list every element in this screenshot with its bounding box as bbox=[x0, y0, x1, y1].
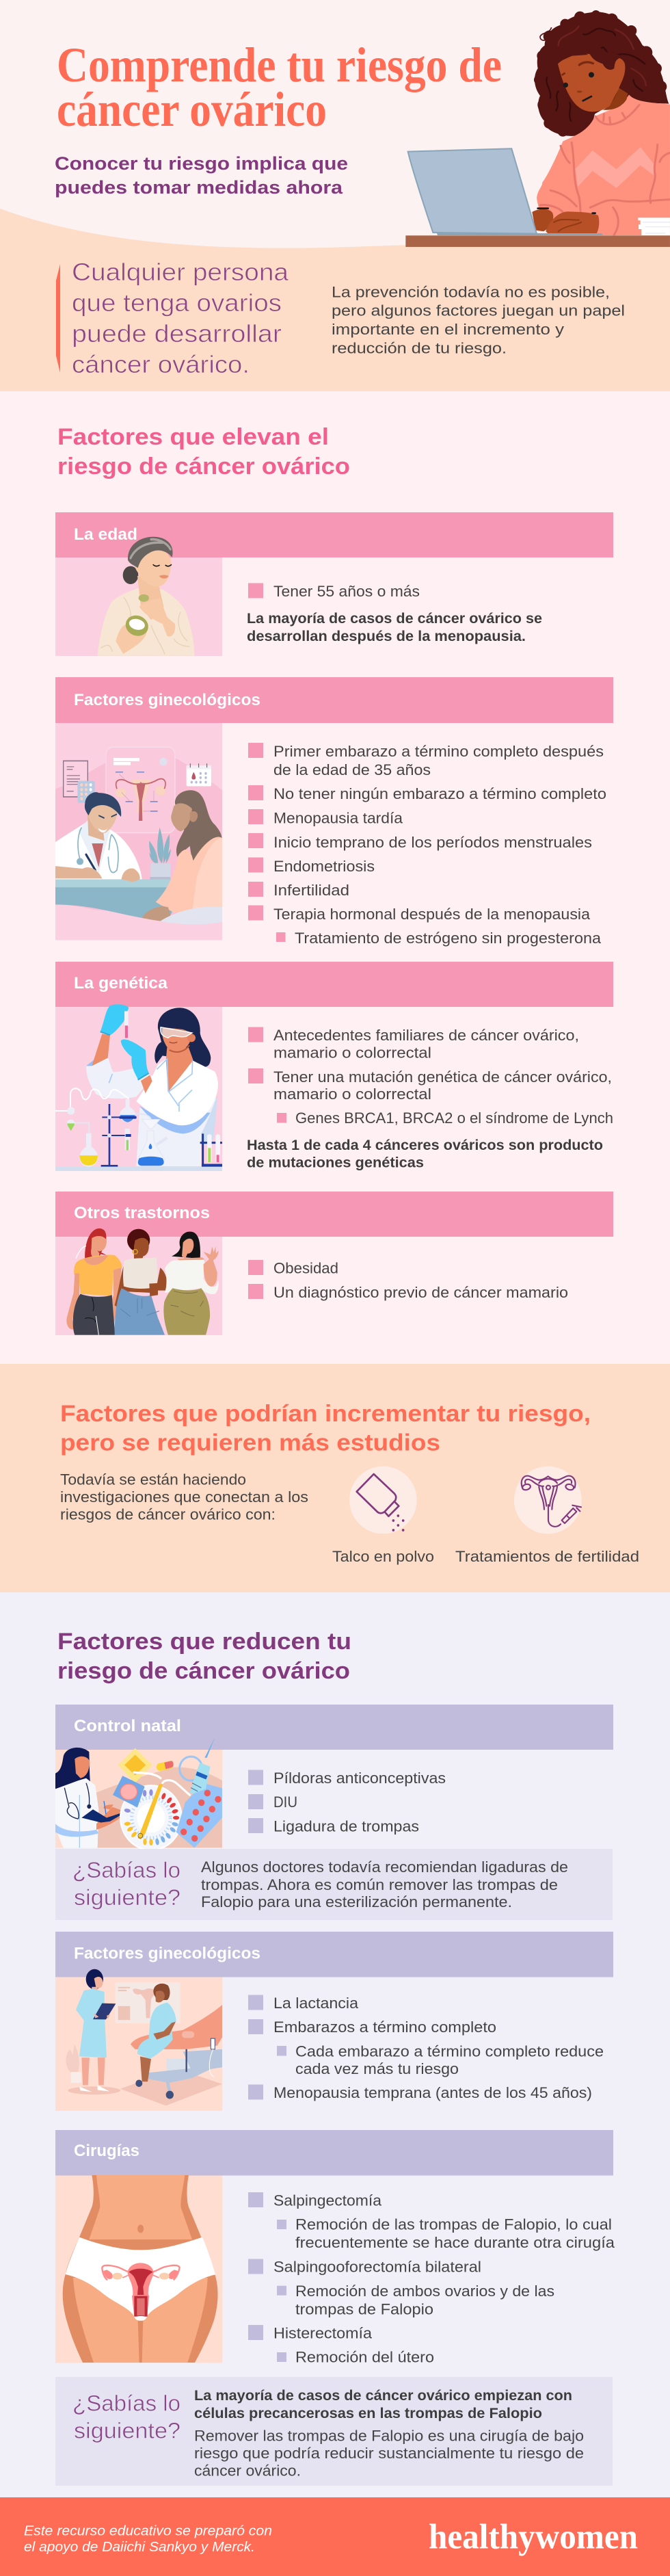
panel: gynecological factors (risk): Tratamiento de estrógeno sin progesterona bbox=[295, 930, 602, 947]
panel: surgeries: ¿Sabías lo bbox=[72, 2391, 180, 2416]
panel: genetics: Antecedentes familiares de cáncer ovárico, bbox=[273, 1027, 579, 1044]
panel: gynecological factors (risk): Menopausia tardía bbox=[273, 810, 403, 826]
panel: other conditions bbox=[55, 999, 613, 1335]
callout bar bbox=[56, 264, 60, 373]
panel: surgeries: Remoción de las trompas de Falopio, lo cual bbox=[295, 2216, 612, 2233]
hands bbox=[532, 209, 553, 231]
labels: Talco en polvo bbox=[332, 1548, 434, 1565]
list bbox=[248, 1770, 263, 1785]
panel: factors needing more study: Tratamientos de fertilidad bbox=[455, 1548, 639, 1565]
callout bbox=[55, 1849, 613, 1920]
plant bbox=[149, 828, 171, 863]
callout statement: cáncer ovárico. bbox=[72, 350, 250, 378]
text: riesgos de cáncer ovárico con: bbox=[60, 1506, 276, 1523]
callout statement: Cualquier persona bbox=[72, 258, 289, 286]
laptop bbox=[437, 233, 603, 235]
illustration: doctor and patient bbox=[55, 747, 222, 939]
flask yellow bbox=[79, 1133, 98, 1167]
plant bbox=[66, 2045, 79, 2072]
intro paragraph: La prevención todavía no es posible, bbox=[332, 283, 610, 300]
sponsor note bbox=[24, 2523, 272, 2555]
sponsor note: Este recurso educativo se preparó con bbox=[24, 2523, 272, 2539]
band bbox=[55, 677, 613, 723]
test tube bbox=[124, 1011, 129, 1038]
IUD bbox=[134, 1772, 190, 1795]
panel: surgeries: siguiente? bbox=[74, 2419, 180, 2443]
band bbox=[55, 1192, 613, 1237]
illustration: older woman with cream bbox=[98, 537, 194, 656]
heading bbox=[60, 1401, 591, 1456]
tubes bbox=[55, 1088, 129, 1111]
panel: birth control: Ligadura de trompas bbox=[273, 1818, 419, 1835]
funnel flask bbox=[135, 1114, 151, 1120]
list bbox=[248, 1995, 263, 2010]
papers bbox=[638, 218, 670, 235]
band bbox=[55, 1932, 613, 1977]
list bbox=[248, 743, 263, 758]
text: investigaciones que conectan a los bbox=[60, 1488, 308, 1506]
subtitle: Conocer tu riesgo implica que bbox=[55, 153, 348, 174]
panel: surgeries: células precancerosas en las trompas de Falopio bbox=[194, 2405, 542, 2421]
panel: gynecological factors (risk): Inicio temprano de los períodos menstruales bbox=[273, 834, 592, 851]
floor shadows bbox=[120, 2068, 222, 2105]
panel: surgeries: Histerectomía bbox=[273, 2325, 373, 2342]
heading: factors that reduce risk bbox=[57, 1629, 351, 1684]
panel: age: Tener 55 años o más bbox=[273, 583, 420, 600]
callout statement: que tenga ovarios bbox=[72, 289, 282, 317]
panel: gynecological factors (protective): Embarazos a término completo bbox=[273, 2019, 496, 2036]
hair bbox=[155, 1008, 211, 1067]
round flask bbox=[120, 1099, 135, 1122]
uterus bbox=[102, 2263, 180, 2319]
table bbox=[55, 880, 174, 888]
face bbox=[603, 88, 628, 110]
panel: genetics bbox=[55, 962, 613, 1171]
heading: pero se requieren más estudios bbox=[60, 1430, 440, 1456]
panel: other conditions: Otros trastornos bbox=[74, 1204, 210, 1222]
panel: gynecological factors (risk) bbox=[55, 677, 613, 947]
band bbox=[55, 512, 613, 557]
panel: other conditions: Obesidad bbox=[273, 1260, 338, 1276]
panel: factors needing more study bbox=[60, 1401, 639, 1565]
callout statement bbox=[72, 258, 289, 378]
panel: surgeries: Salpingectomía bbox=[273, 2192, 382, 2209]
condom blue bbox=[113, 1776, 145, 1807]
panel: surgeries: Cirugías bbox=[74, 2142, 139, 2160]
illustration: three women bbox=[66, 999, 219, 1335]
pill bbox=[156, 1760, 174, 1772]
patient bbox=[175, 790, 222, 886]
panel: gynecological factors (risk): Terapia hormonal después de la menopausia bbox=[273, 906, 591, 923]
panel: surgeries: La mayoría de casos de cáncer ovárico empiezan con bbox=[194, 2387, 572, 2404]
title: Comprende tu riesgo de bbox=[57, 38, 502, 92]
intro paragraph bbox=[332, 283, 625, 357]
panel: gynecological factors (risk): No tener ningún embarazo a término completo bbox=[273, 785, 606, 802]
panel: genetics: Tener una mutación genética de cáncer ovárico, bbox=[273, 1068, 612, 1086]
panel: other conditions: Un diagnóstico previo de cáncer mamario bbox=[273, 1284, 568, 1301]
band bbox=[55, 1705, 613, 1750]
condom yellow bbox=[118, 1748, 152, 1783]
panel: gynecological factors (protective): Factores ginecológicos bbox=[74, 1944, 260, 1962]
intro paragraph: reducción de tu riesgo. bbox=[332, 340, 507, 357]
illustration: torso and uterus bbox=[63, 2175, 218, 2363]
panel: surgeries: Remover las trompas de Falopio es una cirugía de bajo bbox=[194, 2428, 584, 2445]
text bbox=[60, 1471, 308, 1523]
stand bbox=[101, 1104, 118, 1166]
text: Todavía se están haciendo bbox=[60, 1471, 246, 1488]
band bbox=[55, 2130, 613, 2175]
intro paragraph: importante en el incremento y bbox=[332, 321, 564, 338]
logo wordmark: healthywomen bbox=[429, 2518, 638, 2557]
list bbox=[248, 1027, 263, 1042]
panel: surgeries: trompas de Falopio bbox=[295, 2301, 433, 2318]
note: La mayoría de casos de cáncer ovárico se bbox=[247, 610, 542, 627]
list bbox=[248, 583, 263, 598]
wall poster bbox=[116, 1982, 180, 2023]
panel: gynecological factors (risk): Infertilidad bbox=[273, 882, 349, 899]
rack bbox=[200, 1133, 222, 1165]
panel: surgeries: Salpingooforectomía bilateral bbox=[273, 2259, 481, 2275]
doctor bbox=[86, 1969, 103, 1989]
panel: genetics: La genética bbox=[74, 974, 168, 993]
band bbox=[55, 962, 613, 1007]
doctor bbox=[55, 821, 142, 880]
sweater bbox=[537, 94, 670, 235]
panel: gynecological factors (risk): de la edad de 35 años bbox=[273, 761, 431, 778]
note: Hasta 1 de cada 4 cánceres ováricos son producto bbox=[247, 1137, 603, 1153]
illustration: contraceptives bbox=[55, 1737, 222, 1850]
panel: gynecological factors (risk): Factores ginecológicos bbox=[74, 691, 260, 709]
blister pack bbox=[176, 1783, 222, 1848]
panel: genetics: de mutaciones genéticas bbox=[247, 1155, 424, 1171]
panel: surgeries: Remoción del útero bbox=[295, 2349, 434, 2366]
list bbox=[248, 1260, 263, 1275]
heading: factors that raise risk: riesgo de cáncer ovárico bbox=[57, 454, 350, 479]
panel: birth control: Píldoras anticonceptivas bbox=[273, 1770, 446, 1787]
table bbox=[405, 235, 670, 247]
dial pack bbox=[120, 1785, 182, 1850]
panel: gynecological factors (risk): Endometriosis bbox=[273, 858, 375, 875]
panel: birth control: siguiente? bbox=[74, 1885, 180, 1910]
hair bbox=[534, 10, 669, 137]
heading: factors that reduce risk: Factores que reducen tu bbox=[57, 1629, 351, 1655]
panel: birth control: DIU bbox=[273, 1793, 297, 1811]
neck and chest bbox=[166, 1048, 193, 1092]
exam table bbox=[167, 2059, 189, 2071]
panel: gynecological factors (risk): Primer embarazo a término completo después bbox=[273, 743, 604, 760]
panel: birth control: ¿Sabías lo bbox=[72, 1858, 180, 1882]
icon: fertility treatment bbox=[514, 1467, 582, 1534]
panel: birth control: Algunos doctores todavía recomiendan ligaduras de bbox=[201, 1858, 568, 1876]
panel: birth control bbox=[55, 1705, 613, 1920]
syringe bbox=[180, 1757, 202, 1780]
title bbox=[57, 38, 502, 137]
arm and gloves bbox=[141, 1075, 152, 1093]
panel: birth control: Falopio para una esterilización permanente. bbox=[201, 1893, 512, 1910]
panel: gynecological factors (protective): Menopausia temprana (antes de los 45 años) bbox=[273, 2084, 592, 2101]
panel: gynecological factors (protective): Cada embarazo a término completo reduce bbox=[295, 2042, 604, 2060]
panel: age: desarrollan después de la menopausia. bbox=[247, 628, 526, 644]
underwear bbox=[66, 2237, 215, 2321]
panel: gynecological factors (protective): La lactancia bbox=[273, 1995, 359, 2012]
subtitle: puedes tomar medidas ahora bbox=[55, 177, 343, 198]
panel: gynecological factors (protective): cada vez más tu riesgo bbox=[295, 2060, 459, 2077]
panel: gynecological factors (protective) bbox=[55, 1932, 613, 2111]
callout statement: puede desarrollar bbox=[72, 319, 282, 347]
panel: age bbox=[55, 512, 613, 656]
intro paragraph: pero algunos factores juegan un papel bbox=[332, 302, 625, 319]
panel: surgeries: Remoción de ambos ovarios y de las bbox=[295, 2283, 554, 2300]
panel: birth control: Control natal bbox=[74, 1717, 181, 1735]
list bbox=[248, 2192, 263, 2207]
icon: talc powder bbox=[349, 1467, 417, 1534]
illustration: exam room bbox=[66, 1969, 222, 2105]
panel: genetics: mamario o colorrectal bbox=[273, 1086, 431, 1103]
illustration: woman at laptop bbox=[405, 10, 670, 247]
title: cáncer ovárico bbox=[57, 82, 327, 137]
heading: factors that raise risk: Factores que elevan el bbox=[57, 424, 329, 450]
subtitle bbox=[55, 153, 348, 198]
panel: genetics: Genes BRCA1, BRCA2 o el síndrome de Lynch bbox=[295, 1109, 613, 1127]
callout bbox=[55, 2377, 613, 2486]
lab coat bbox=[136, 1096, 217, 1166]
heading: factors that reduce risk: riesgo de cáncer ovárico bbox=[57, 1658, 350, 1684]
footer bbox=[0, 2497, 670, 2576]
panel: birth control: trompas. Ahora es común remover las trompas de bbox=[201, 1876, 558, 1893]
panel: genetics: mamario o colorrectal bbox=[273, 1044, 431, 1062]
patient bbox=[140, 2056, 151, 2081]
panel: surgeries: frecuentemente se hace durante otra cirugía bbox=[295, 2234, 615, 2251]
illustration: scientist in lab bbox=[55, 1004, 222, 1171]
sponsor note: el apoyo de Daiichi Sankyo y Merck. bbox=[24, 2539, 255, 2555]
panel: surgeries: riesgo que podría reducir sustancialmente tu riesgo de bbox=[194, 2445, 584, 2462]
torso bbox=[63, 2175, 218, 2363]
panel: surgeries bbox=[55, 2130, 615, 2486]
woman 1 bbox=[85, 1228, 106, 1260]
heading: factors that raise risk bbox=[57, 424, 350, 479]
heading: Factores que podrían incrementar tu riesgo, bbox=[60, 1401, 591, 1427]
woman 3 bbox=[172, 1232, 200, 1259]
woman 2 bbox=[156, 1267, 168, 1291]
panel: age: La edad bbox=[74, 525, 137, 544]
doctor bbox=[55, 1748, 91, 1789]
panel: surgeries: cáncer ovárico. bbox=[194, 2462, 301, 2479]
